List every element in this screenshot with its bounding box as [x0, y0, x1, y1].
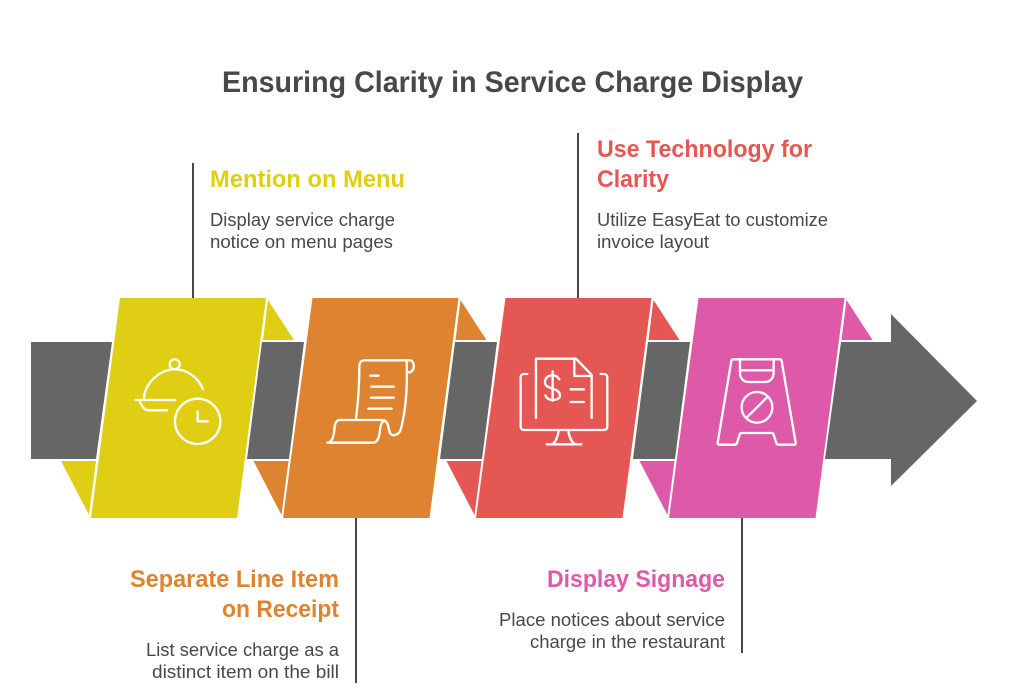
step 4 text: Display Signage: [547, 566, 725, 593]
icon: warning floor sign: [718, 359, 796, 445]
panel: display signage: [640, 298, 872, 518]
step 3 text: invoice layout: [597, 232, 709, 252]
step 4 text: Place notices about service: [499, 610, 725, 630]
panel: use technology: [446, 298, 680, 518]
step 2 text: distinct item on the bill: [152, 662, 339, 682]
step 3 text: Use Technology for: [597, 136, 812, 163]
step 4 text: charge in the restaurant: [530, 632, 725, 652]
step 2 text: Separate Line Item: [130, 566, 339, 593]
step 2 text: [130, 566, 340, 682]
step 1 text: Display service charge: [210, 210, 395, 230]
icon: receipt scroll: [327, 360, 414, 443]
title: Ensuring Clarity in Service Charge Display: [222, 66, 803, 99]
step 3 text: Clarity: [597, 166, 670, 193]
icon: invoice on monitor: [521, 359, 607, 444]
step 4 text: [499, 566, 725, 652]
arrow band: [31, 314, 977, 486]
step 1 text: notice on menu pages: [210, 232, 393, 252]
step 2 text: List service charge as a: [146, 640, 340, 660]
step 2 text: on Receipt: [222, 596, 339, 623]
step 3 text: [597, 136, 828, 252]
panel: separate line item: [254, 298, 486, 518]
connector lines: [193, 133, 742, 683]
step 3 text: Utilize EasyEat to customize: [597, 210, 828, 230]
step 1 text: [210, 166, 405, 252]
step 1 text: Mention on Menu: [210, 166, 405, 193]
icon: cloche and clock: [136, 359, 220, 444]
panel: mention on menu: [61, 298, 294, 518]
